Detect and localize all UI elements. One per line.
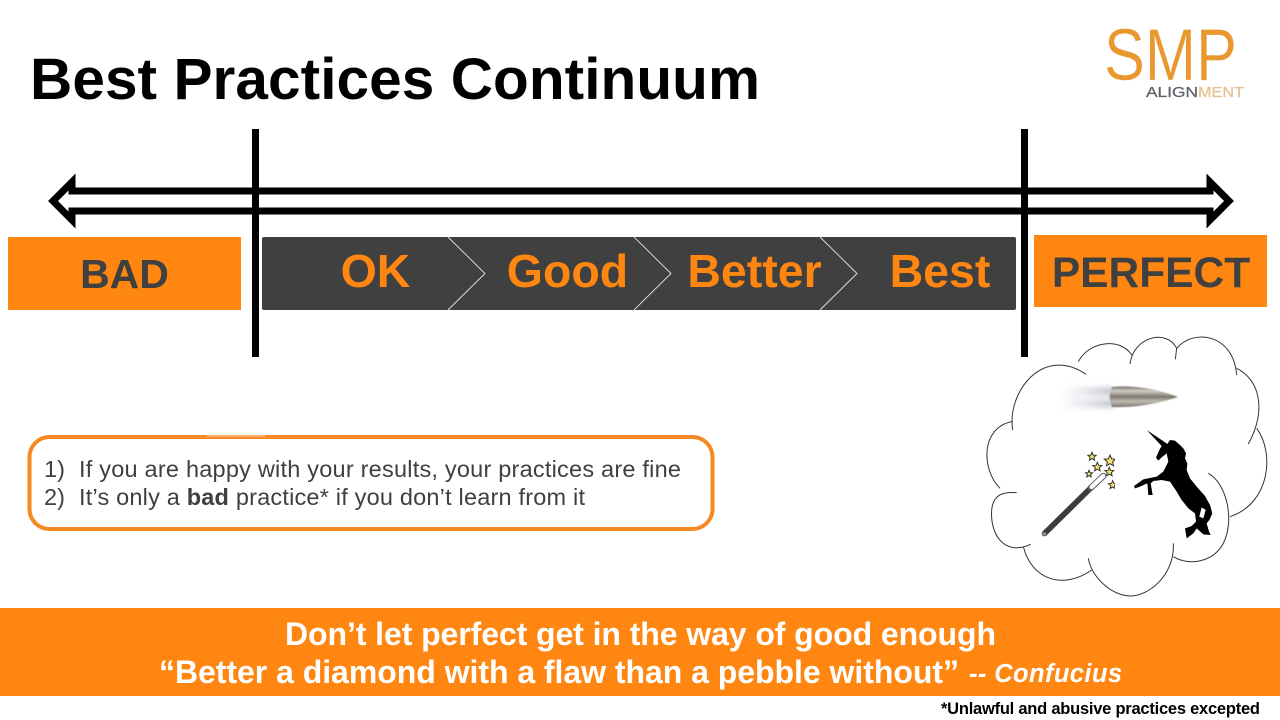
logo: SMP Alignment: ALIGN: [1146, 85, 1198, 101]
callout: two rules: [30, 435, 712, 529]
icon: unicorn silhouette: [1134, 430, 1212, 538]
cloud outline: [987, 336, 1267, 596]
step: Best: Best: [890, 245, 990, 297]
step: Better: Better: [687, 245, 822, 297]
banner line 2: “Better a diamond with a flaw than a pebble without”: [159, 654, 959, 690]
right boundary line: [1021, 129, 1028, 357]
step: OK: OK: [341, 245, 411, 297]
thought cloud with impossible things: [987, 336, 1267, 596]
double-headed continuum arrow: [53, 182, 1229, 220]
rule 2: 2): [44, 484, 65, 510]
box: BAD: BAD: [80, 251, 169, 297]
rule 2: It’s only a bad practice* if you don’t learn from it: [79, 484, 585, 510]
box: BAD: [8, 237, 241, 310]
banner line 1: Don’t let perfect get in the way of good enough: [285, 616, 996, 652]
logo: SMP Alignment: SMP: [1104, 15, 1237, 96]
chevron process bar: [262, 237, 1016, 310]
icon: speeding bullet: [1060, 386, 1178, 408]
box: PERFECT: [1034, 235, 1267, 307]
attribution: -- Confucius: [969, 660, 1122, 688]
left boundary line: [252, 129, 259, 357]
rule 1: 1): [44, 456, 65, 482]
box: PERFECT: PERFECT: [1052, 250, 1250, 297]
step: Good: Good: [507, 245, 628, 297]
footnote: *Unlawful and abusive practices excepted: [941, 700, 1260, 718]
rule 1: If you are happy with your results, your practices are fine: [79, 456, 681, 482]
banner: quote: [0, 608, 1280, 696]
icon: magic wand with stars: [1042, 452, 1117, 536]
title: Best Practices Continuum: [30, 47, 760, 112]
logo: SMP Alignment: MENT: [1198, 85, 1244, 101]
